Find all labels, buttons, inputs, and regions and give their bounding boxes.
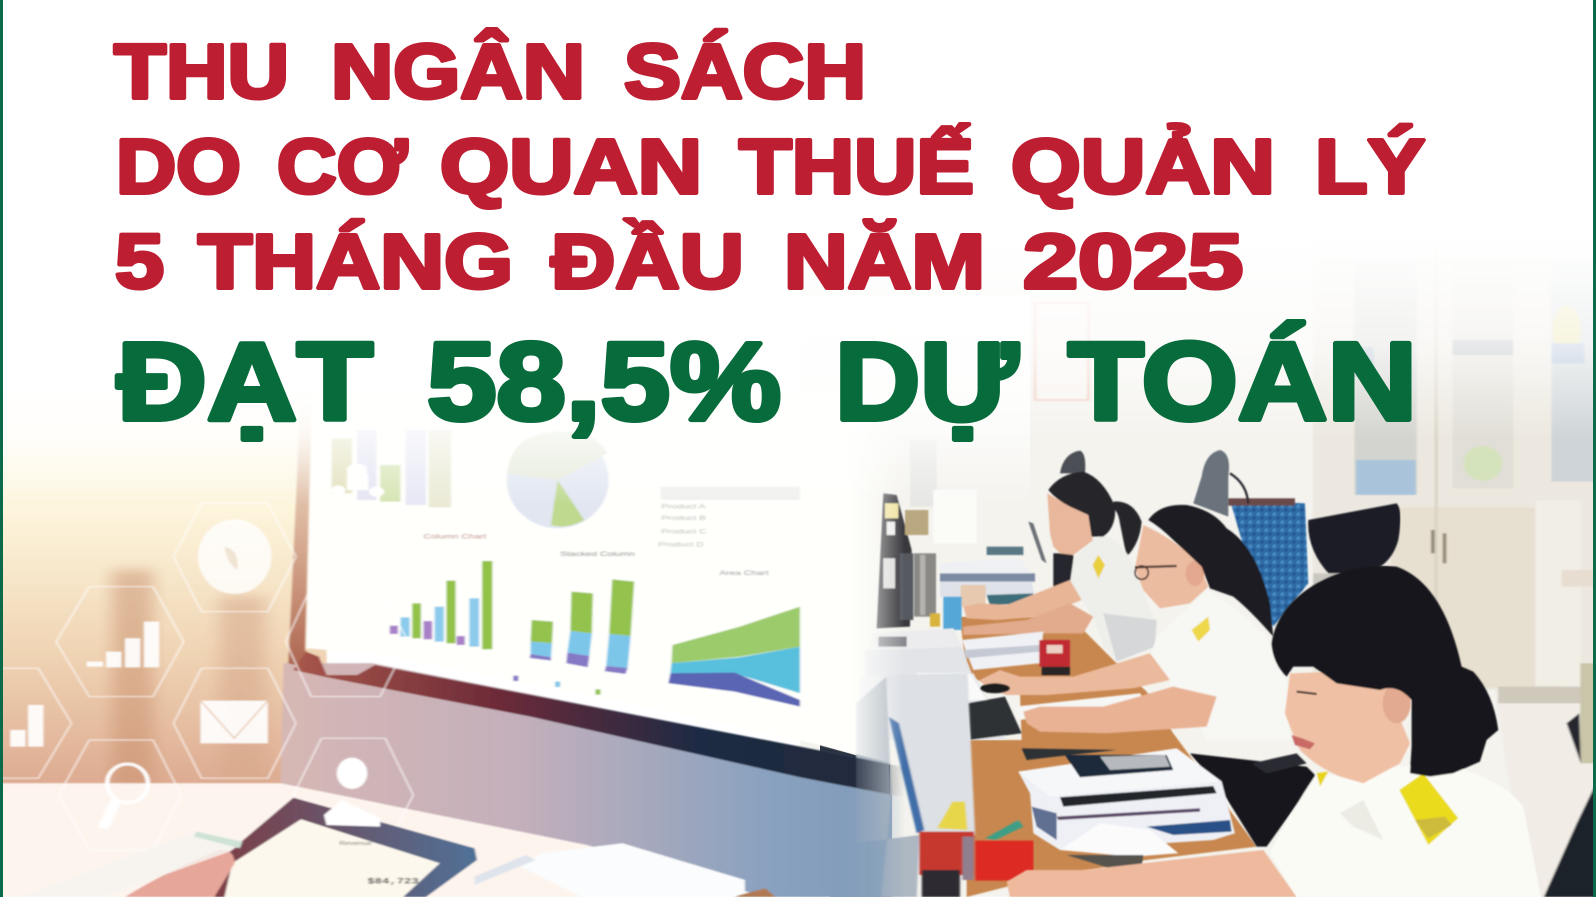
cabinets bbox=[1313, 197, 1596, 690]
column chart bbox=[390, 532, 492, 649]
photo: monitor rear continuation bbox=[820, 745, 892, 897]
photo: tax office desk bbox=[960, 617, 1257, 897]
left green edge bbox=[0, 0, 3, 897]
monitor body bbox=[281, 663, 969, 897]
monitor screen bbox=[304, 448, 902, 764]
title: red headline: DO bbox=[116, 124, 241, 210]
stand highlight bbox=[520, 843, 745, 897]
icon: magnifier bbox=[103, 764, 148, 828]
printer bbox=[860, 628, 1007, 740]
tablet: Revenue bbox=[339, 841, 372, 847]
photo: front worker and paper stacks bbox=[1007, 566, 1541, 897]
photo: monitors, red boxes and notes foreground bbox=[856, 673, 1034, 897]
title: green highlight: TOÁN bbox=[1068, 320, 1417, 444]
wall poster bbox=[1035, 303, 1088, 400]
title: red headline: NGÂN bbox=[331, 28, 585, 115]
fade overlay across the photo bbox=[0, 235, 1596, 440]
headrests bbox=[1060, 451, 1085, 473]
faded data table: Product D bbox=[658, 540, 703, 548]
fade overlay over the monitor bbox=[0, 295, 1030, 505]
right green edge bbox=[1593, 0, 1596, 897]
hexagons bbox=[3, 502, 415, 810]
title: green highlight: 58,5% bbox=[427, 320, 781, 444]
blurred warm backdrop bbox=[3, 443, 328, 784]
title: red headline: 5 bbox=[115, 219, 164, 305]
tablet: $84,723 bbox=[367, 877, 419, 886]
monitor back and thermos bbox=[877, 493, 936, 628]
title: red headline: SÁCH bbox=[624, 28, 866, 115]
monitor bottom band bbox=[292, 652, 901, 796]
area chart bbox=[668, 569, 800, 707]
floor bbox=[1496, 683, 1596, 897]
monitor bezel left bbox=[288, 390, 327, 673]
back stack and cup bbox=[930, 547, 1035, 630]
blue mesh chair bbox=[1230, 500, 1308, 627]
title: red headline: 2025 bbox=[1023, 219, 1243, 305]
faded data table bbox=[658, 487, 800, 548]
paper stack and stamp bbox=[962, 632, 1070, 675]
icon: small bar chart bbox=[10, 705, 43, 747]
title: green highlight bbox=[117, 320, 1417, 444]
stacked column chart bbox=[513, 550, 635, 695]
hand bbox=[125, 850, 235, 897]
faded data table: Product C bbox=[661, 527, 707, 535]
icon: globe bbox=[198, 519, 271, 594]
area chart: Area Chart bbox=[719, 569, 769, 577]
tablet bbox=[214, 798, 477, 897]
white header area bbox=[0, 0, 1596, 235]
title: red headline: NĂM bbox=[784, 219, 985, 305]
brown columns bbox=[112, 570, 153, 787]
column chart: Column Chart bbox=[423, 532, 487, 540]
faded top charts bbox=[331, 430, 451, 507]
photo: office room backdrop bbox=[800, 197, 1596, 897]
pie chart bbox=[507, 432, 609, 528]
title: red headline bbox=[114, 28, 1425, 305]
calculator and stacks bbox=[1018, 748, 1235, 868]
faded data table: Product B bbox=[661, 514, 706, 522]
title: green highlight: ĐẠT bbox=[117, 320, 373, 444]
title: green highlight: DỰ bbox=[835, 320, 1019, 444]
title: red headline: THUẾ bbox=[739, 123, 974, 210]
faded data table: Product A bbox=[661, 502, 706, 510]
keyboard bbox=[967, 697, 1022, 740]
back worker bbox=[963, 472, 1157, 662]
table surface bbox=[0, 783, 765, 897]
photo: analytics monitor and digital icons bbox=[3, 424, 903, 897]
trousers and armrest bbox=[1190, 753, 1317, 847]
title: red headline: ĐẦU bbox=[551, 218, 744, 305]
photo: two workers in the background bbox=[860, 440, 1400, 740]
icon: bar chart bbox=[87, 622, 159, 667]
title: red headline: QUẢN bbox=[1011, 123, 1275, 210]
title: red headline: LÝ bbox=[1315, 123, 1425, 210]
front worker bbox=[1007, 566, 1541, 897]
black chair bbox=[1308, 503, 1400, 575]
right desk bbox=[1562, 570, 1596, 587]
title: red headline: QUAN bbox=[440, 124, 702, 210]
stacked column chart: Stacked Column bbox=[560, 550, 635, 558]
title: red headline: THU bbox=[114, 29, 289, 115]
wall column and window bbox=[910, 440, 937, 507]
papers at tablet bbox=[166, 846, 237, 875]
icon: person bbox=[324, 758, 380, 827]
middle worker bbox=[980, 505, 1290, 740]
wall bbox=[800, 197, 1596, 897]
icon: envelope bbox=[201, 701, 268, 743]
title: red headline: THÁNG bbox=[198, 218, 513, 305]
title: red headline: CƠ bbox=[277, 124, 407, 210]
